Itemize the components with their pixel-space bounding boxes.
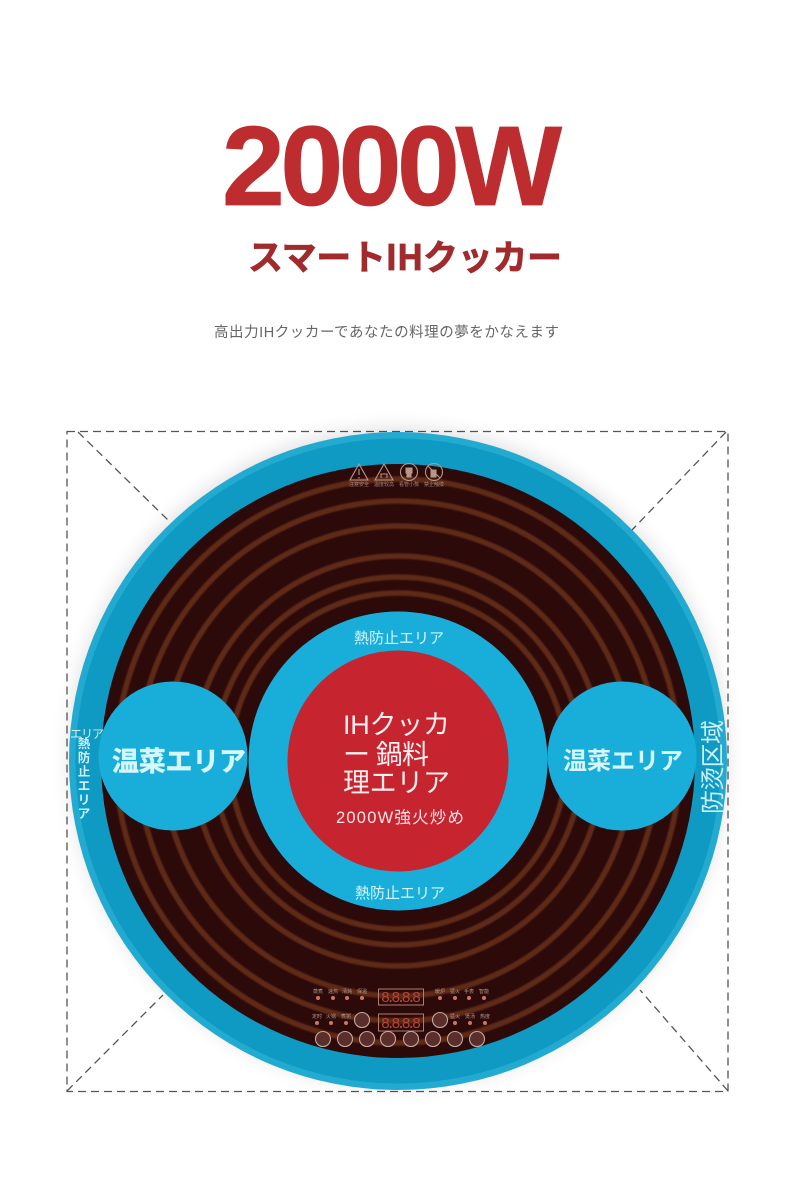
warning labels: 禁止触摸 — [424, 481, 444, 488]
indicator labels: 定时 — [312, 1013, 322, 1020]
heating coil rings — [116, 479, 680, 1043]
heat-proof label top: 熱防止エリア — [354, 630, 444, 647]
cooktop diagram — [69, 429, 727, 1090]
left rim label: ア — [78, 807, 90, 821]
control panel — [312, 988, 490, 1046]
indicator labels: 清炖 — [342, 988, 352, 995]
indicator labels: 热度 — [480, 1013, 490, 1020]
left rim label: エ — [78, 779, 90, 793]
indicator labels: 煮粥 — [341, 1013, 351, 1020]
indicator labels: 速热 — [328, 988, 338, 995]
indicator labels: 猛火 — [450, 988, 460, 995]
indicator labels: 猛火 — [450, 1013, 460, 1020]
indicator labels: 暖炉 — [435, 988, 445, 995]
indicator labels: 煲汤 — [465, 1013, 475, 1020]
warning labels: 看管小孩 — [399, 481, 419, 488]
touch buttons — [316, 1012, 484, 1046]
cooking zone heading: 理エリア — [343, 768, 450, 798]
left rim label: エリア — [70, 727, 104, 741]
left rim label: 熱 — [78, 736, 91, 751]
indicator labels — [312, 988, 490, 1020]
warning labels: 注意安全 — [349, 481, 369, 488]
indicator labels: 火锅 — [326, 1013, 336, 1020]
warning labels — [349, 481, 444, 488]
indicator labels: 蒸煮 — [313, 988, 323, 995]
left rim label: リ — [78, 793, 90, 807]
right warming zone: 温菜エリア — [563, 748, 683, 775]
right rim label: 防烫区域 — [700, 720, 727, 814]
cooktop glass surface — [101, 464, 695, 1058]
centre red cooking zone — [288, 650, 508, 872]
icon: caution triangle — [350, 464, 368, 480]
title: 2000W: 2000W — [222, 103, 562, 229]
indicator lights — [315, 996, 487, 1025]
icon: supervise children — [400, 464, 418, 480]
cooking zone caption: 2000W強火炒め — [336, 808, 464, 827]
cooktop blue rim — [69, 432, 727, 1090]
LED displays: 8.8.8.8 — [381, 990, 421, 1007]
indicator labels: 保温 — [357, 988, 367, 995]
icon: hot surface triangle — [375, 464, 393, 480]
left rim label: 止 — [78, 764, 90, 779]
centre heat-proof ring — [248, 612, 548, 910]
indicator labels: 手表 — [464, 988, 474, 995]
left rim label — [70, 727, 104, 821]
left warming zone: 温菜エリア — [112, 747, 246, 777]
tagline: 高出力IHクッカーであなたの料理の夢をかなえます — [214, 324, 559, 341]
subtitle: smart IH cooker: スマートIHクッカー — [248, 230, 562, 281]
icon: do not touch — [426, 464, 442, 480]
dashed dimension frame — [67, 432, 728, 1092]
cooking zone heading: IHクッカ — [343, 710, 450, 740]
LED displays: 8.8.8.8 — [381, 1016, 421, 1033]
heat-proof label bottom: 熱防止エリア — [355, 885, 445, 902]
cooking zone heading: ー 鍋料 — [343, 740, 429, 770]
indicator labels: 智能 — [479, 988, 489, 995]
warning icons — [349, 464, 444, 488]
warning labels: 温度较高 — [374, 481, 394, 488]
LED displays — [378, 989, 424, 1033]
cooking zone heading — [343, 710, 450, 798]
right warming zone — [548, 682, 696, 830]
left rim label: 防 — [78, 750, 90, 765]
left warming zone — [98, 682, 248, 830]
